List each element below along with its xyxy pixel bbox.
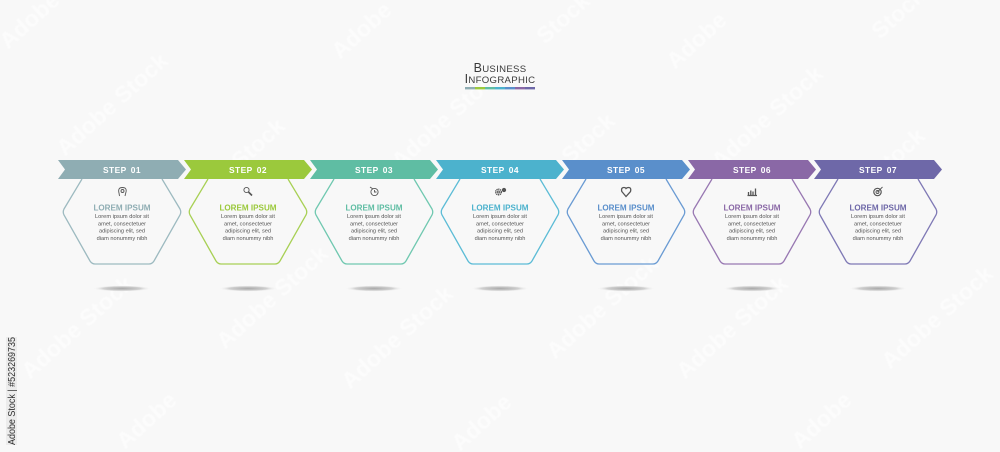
icon: heart in hand: [622, 188, 631, 196]
title colour bar: [465, 87, 535, 89]
step 03 body: adipiscing elit, sed: [351, 229, 397, 235]
step 05 body: Lorem ipsum dolor sit: [599, 214, 653, 220]
step 03 shadow: [345, 286, 403, 292]
step 06 hexagon: [693, 179, 811, 264]
step 04 body: Lorem ipsum dolor sit: [473, 214, 527, 220]
step 06 body: amet, consectetuer: [728, 221, 776, 227]
step 06 body: adipiscing elit, sed: [729, 229, 775, 235]
step 07 heading: LOREM IPSUM: [849, 204, 907, 212]
step 07 body: [851, 214, 905, 242]
step 03 hexagon: [315, 179, 433, 264]
step 06 body: diam nonummy nibh: [727, 236, 777, 242]
title: [465, 61, 535, 89]
icon: stopwatch: [370, 187, 378, 196]
step 04 label: STEP 04: [481, 165, 519, 175]
step 05 body: diam nonummy nibh: [601, 236, 651, 242]
step 02 panel: [184, 160, 312, 292]
step 04 hexagon: [441, 179, 559, 264]
watermark pattern: Adobe Stock: [386, 60, 508, 174]
watermark pattern: Adobe Stock: [211, 240, 333, 354]
step 07 body: amet, consectetuer: [854, 221, 902, 227]
step 05 label: STEP 05: [607, 165, 645, 175]
step 05 panel: [562, 160, 690, 292]
watermark pattern: Stock: [226, 112, 290, 174]
step 03 body: amet, consectetuer: [350, 221, 398, 227]
step 02 body: [221, 214, 275, 242]
step 07 panel: [814, 160, 942, 292]
watermark pattern: Adobe Stock: [671, 270, 793, 384]
icon: gears: [496, 188, 506, 195]
step 03 body: [347, 214, 401, 242]
title: INFOGRAPHIC: [465, 72, 535, 86]
icon: head: [119, 188, 126, 196]
step 02 body: adipiscing elit, sed: [225, 229, 271, 235]
step 06 label: STEP 06: [733, 165, 771, 175]
step 01 body: amet, consectetuer: [98, 221, 146, 227]
step 05 body: amet, consectetuer: [602, 221, 650, 227]
step 03 arrow: [310, 160, 438, 179]
step 01 body: Lorem ipsum dolor sit: [95, 214, 149, 220]
step 05 hexagon: [567, 179, 685, 264]
step 06 body: Lorem ipsum dolor sit: [725, 214, 779, 220]
step 02 body: diam nonummy nibh: [223, 236, 273, 242]
icon: target: [874, 187, 882, 196]
step 01 body: diam nonummy nibh: [97, 236, 147, 242]
step 06 arrow: [688, 160, 816, 179]
step 01 hexagon: [63, 179, 181, 264]
watermark pattern: Stock: [556, 107, 620, 169]
step 04 shadow: [471, 286, 529, 292]
step 06 heading: LOREM IPSUM: [723, 204, 781, 212]
watermark pattern: Adobe Stock: [336, 280, 458, 394]
step 02 body: amet, consectetuer: [224, 221, 272, 227]
icon: magnifier: [244, 187, 252, 196]
step 02 label: STEP 02: [229, 165, 267, 175]
step 02 heading: LOREM IPSUM: [219, 204, 277, 212]
step 03 heading: LOREM IPSUM: [345, 204, 403, 212]
watermark pattern: Adobe Stock: [876, 260, 998, 374]
step 03 panel: [310, 160, 438, 292]
step 06 body: [725, 214, 779, 242]
step 05 body: [599, 214, 653, 242]
step 02 body: Lorem ipsum dolor sit: [221, 214, 275, 220]
step 02 hexagon: [189, 179, 307, 264]
step 01 panel: [58, 160, 186, 292]
step 07 arrow: [814, 160, 942, 179]
step 04 body: amet, consectetuer: [476, 221, 524, 227]
step 03 label: STEP 03: [355, 165, 393, 175]
step 07 body: diam nonummy nibh: [853, 236, 903, 242]
step 07 label: STEP 07: [859, 165, 897, 175]
step 01 label: STEP 01: [103, 165, 141, 175]
step 01 shadow: [93, 286, 151, 292]
step 01 body: [95, 214, 149, 242]
watermark pattern: Adobe: [786, 387, 857, 452]
icon: bar chart: [748, 188, 757, 196]
step 04 panel: [436, 160, 564, 292]
step 01 heading: LOREM IPSUM: [93, 204, 151, 212]
step 04 heading: LOREM IPSUM: [471, 204, 529, 212]
step 01 arrow: [58, 160, 186, 179]
step 05 body: adipiscing elit, sed: [603, 229, 649, 235]
stock credit: Adobe Stock | #523269735: [6, 337, 18, 445]
step 06 shadow: [723, 286, 781, 292]
step 04 body: adipiscing elit, sed: [477, 229, 523, 235]
step 05 heading: LOREM IPSUM: [597, 204, 655, 212]
step 01 body: adipiscing elit, sed: [99, 229, 145, 235]
step 07 body: adipiscing elit, sed: [855, 229, 901, 235]
step 04 body: diam nonummy nibh: [475, 236, 525, 242]
title: BUSINESS: [474, 61, 526, 75]
watermark pattern: Adobe: [111, 387, 182, 452]
step 04 body: [473, 214, 527, 242]
step 04 arrow: [436, 160, 564, 179]
step 06 panel: [688, 160, 816, 292]
watermark pattern: Adobe: [661, 7, 732, 74]
watermark pattern: Adobe Stock: [541, 250, 663, 364]
watermark pattern: Adobe Stock: [16, 270, 138, 384]
watermark pattern: Adobe Stock: [51, 47, 173, 161]
step 05 shadow: [597, 286, 655, 292]
step 07 hexagon: [819, 179, 937, 264]
watermark pattern: Stock: [866, 122, 930, 184]
step 07 shadow: [849, 286, 907, 292]
step 02 arrow: [184, 160, 312, 179]
step 05 arrow: [562, 160, 690, 179]
step 03 body: diam nonummy nibh: [349, 236, 399, 242]
watermark pattern: Adobe Stock: [706, 60, 828, 174]
step 02 shadow: [219, 286, 277, 292]
step 07 body: Lorem ipsum dolor sit: [851, 214, 905, 220]
step 03 body: Lorem ipsum dolor sit: [347, 214, 401, 220]
